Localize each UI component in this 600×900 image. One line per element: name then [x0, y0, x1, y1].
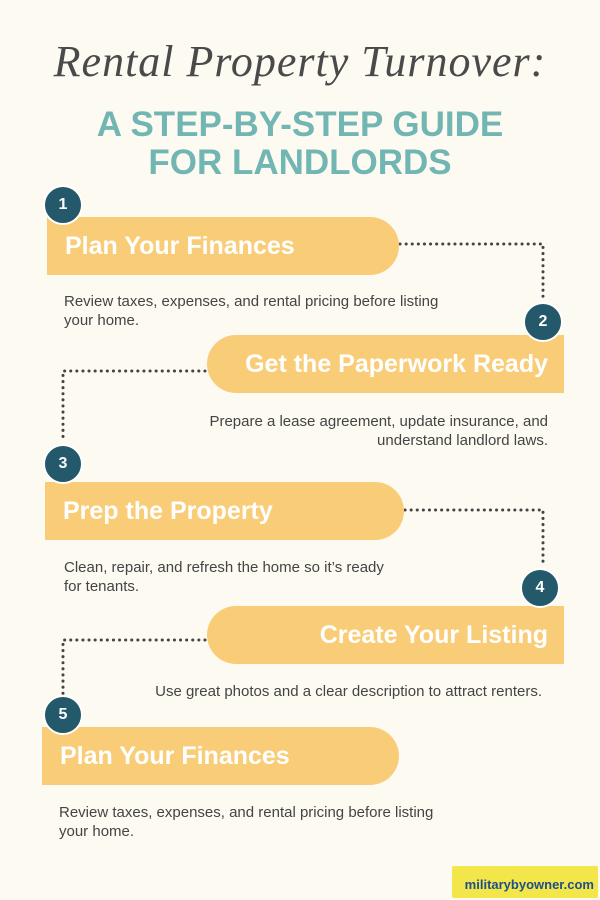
text: Plan Your Finances: [65, 232, 295, 260]
logo: [452, 866, 598, 898]
step 5: [42, 695, 433, 840]
step 1: [43, 185, 438, 329]
step 2: [207, 302, 564, 449]
text: 4: [536, 579, 544, 596]
text: Create Your Listing: [320, 621, 548, 649]
step 3: [43, 444, 404, 595]
subtitle: [97, 105, 503, 182]
text: 3: [59, 455, 67, 472]
subtitle: FOR LANDLORDS: [148, 143, 452, 182]
text: Review taxes, expenses, and rental pricing before listing your home.: [59, 804, 433, 840]
text: 2: [539, 313, 547, 330]
logo: militarybyowner.com: [465, 877, 594, 892]
text: Use great photos and a clear description to attract renters.: [155, 683, 542, 700]
text: Review taxes, expenses, and rental pricing before listing your home.: [64, 293, 438, 329]
text: Get the Paperwork Ready: [245, 350, 548, 378]
text: 5: [59, 706, 67, 723]
step 4: [155, 568, 564, 700]
text: Clean, repair, and refresh the home so it’s ready for tenants.: [64, 559, 384, 595]
text: Prep the Property: [63, 497, 273, 525]
title script: Rental Property Turnover:: [54, 37, 546, 86]
text: 1: [59, 196, 67, 213]
subtitle: A STEP-BY-STEP GUIDE: [97, 105, 503, 144]
text: Plan Your Finances: [60, 742, 290, 770]
text: Prepare a lease agreement, update insurance, and understand landlord laws.: [209, 413, 548, 449]
